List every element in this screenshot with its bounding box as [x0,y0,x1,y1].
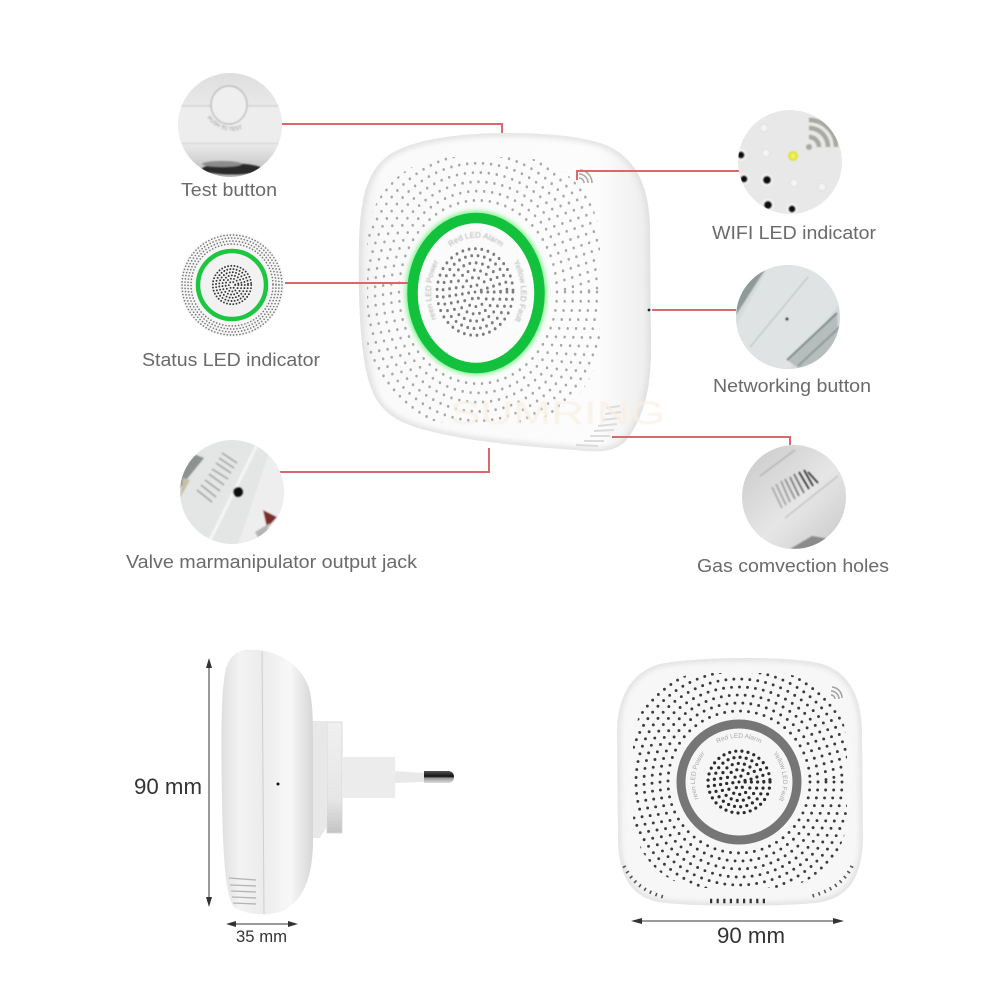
front dots [633,673,847,888]
front view device [617,658,863,906]
label: test button: Test button [181,180,277,200]
outer speaker dots [367,157,600,423]
dimension label: side height: 90 mm [134,774,202,799]
leader line: output jack [280,448,489,472]
networking pinhole [648,309,650,311]
yellow LED [788,151,798,161]
front ring legend: alarm: Red LED Alarm [716,733,762,743]
label: wifi LED: WIFI LED indicator [712,223,876,243]
front ring legend: Green LED Power [690,752,704,800]
callout icon: networking button [736,265,842,369]
leader line: wifi indicator [577,171,740,180]
mini green ring [198,251,266,319]
green LED ring [412,218,540,368]
mini outer dots [182,235,282,335]
leader line: status LED [285,282,408,284]
side body [221,650,313,914]
callout icon: wifi LED [736,110,842,214]
main device: front view with green LED ring [358,133,651,452]
callout icon: convection holes [742,445,846,549]
inner speaker dots [437,249,513,335]
LED ring glow [413,218,539,368]
wifi arcs [809,120,836,147]
black holes [736,150,796,214]
watermark: SUMRING [450,395,665,431]
label: status LED: Status LED indicator [142,350,320,370]
label: convection holes: Gas comvection holes [697,556,889,576]
vent slots [229,878,256,904]
wall plug pin [395,771,424,783]
leader line: networking button [652,309,736,311]
body edge shading [359,133,651,451]
dimension label: front width: 90 mm [717,923,785,948]
grey LED ring [681,724,797,840]
front centre dots [708,751,770,813]
blank holes [760,124,826,191]
leader line: test button [282,124,502,133]
callout icon: test button [178,73,282,177]
vent lines [197,453,237,502]
callout icon: test button: PUSH TO TEST [207,116,242,132]
front edge shading [617,658,863,906]
plug collar [312,721,327,838]
callout icon: output jack [178,440,287,545]
callout icon: status LED [180,233,284,337]
ring legend text: alarm: Red LED Alarm [448,232,504,247]
ring legend text: fault: Yellow LED Fault [514,260,527,322]
front body [617,658,863,906]
label: output jack: Valve marmanipulator output jack [126,552,418,572]
plug body [343,757,395,798]
label: networking button: Networking button [713,376,871,396]
front wifi mark [831,687,842,699]
width dimension arrow [226,921,298,927]
side view device with plug [221,650,454,914]
leader line: convection holes [612,437,790,445]
left corner slots [624,866,664,897]
convection slots [576,406,621,446]
vent slots [772,470,818,508]
device body [359,133,651,451]
right corner slots [812,866,852,896]
pin tip [424,771,454,783]
front ring legend: fault: Yellow LED Fault [774,751,788,802]
body seam [262,651,264,914]
wifi mark [579,170,592,183]
plug flange [327,722,342,833]
mini inner dots [213,266,251,304]
pinhole [276,782,280,786]
ring legend text: Green LED Power [425,260,438,320]
dimension label: depth: 35 mm [236,928,287,946]
front width dimension arrow [631,918,844,924]
height dimension arrow [206,658,212,907]
bottom slots [710,899,767,903]
